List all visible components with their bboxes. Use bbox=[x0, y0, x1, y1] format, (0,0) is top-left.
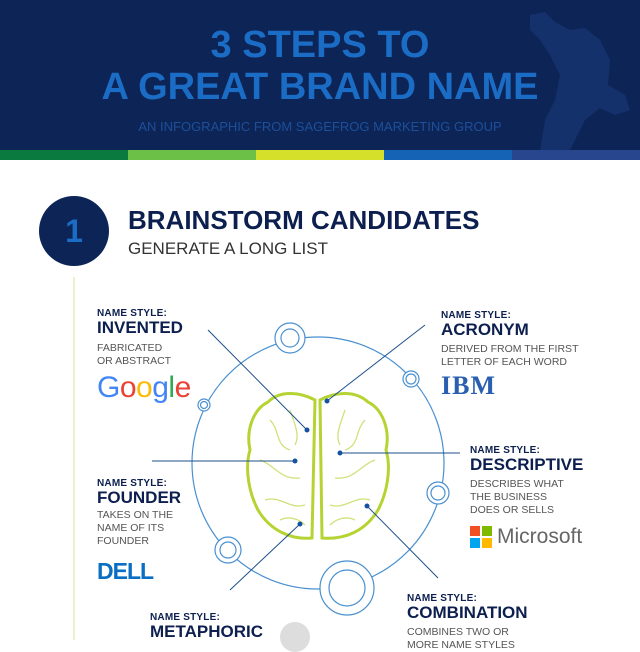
title: 3 STEPS TO bbox=[211, 24, 429, 66]
label: combination: COMBINATION bbox=[407, 603, 528, 622]
subtitle: AN INFOGRAPHIC FROM SAGEFROG MARKETING GROUP bbox=[138, 119, 502, 134]
label: invented: FABRICATED bbox=[97, 342, 162, 354]
logo: IBM: IBM bbox=[441, 371, 496, 400]
label: acronym: NAME STYLE: bbox=[441, 310, 511, 321]
label: acronym bbox=[441, 310, 578, 400]
color stripe bbox=[0, 150, 640, 160]
label: acronym: ACRONYM bbox=[441, 320, 529, 339]
title bbox=[102, 24, 538, 108]
icon: frog silhouette bbox=[530, 12, 630, 150]
label: descriptive bbox=[470, 445, 583, 548]
logo: google: Google bbox=[97, 371, 191, 404]
step number circle: 1 bbox=[65, 213, 83, 249]
label: descriptive: NAME STYLE: bbox=[470, 445, 540, 456]
label: descriptive: DESCRIBES WHAT bbox=[470, 478, 564, 490]
label: invented bbox=[97, 308, 191, 404]
label: combination: COMBINES TWO OR bbox=[407, 626, 509, 638]
step subheading: GENERATE A LONG LIST bbox=[128, 239, 328, 258]
label: metaphoric: NAME STYLE: bbox=[150, 612, 220, 623]
logo: microsoft: Microsoft bbox=[497, 525, 582, 548]
title: A GREAT BRAND NAME bbox=[102, 66, 538, 108]
step heading: BRAINSTORM CANDIDATES bbox=[128, 205, 479, 235]
label: acronym: LETTER OF EACH WORD bbox=[441, 356, 567, 368]
label: founder: NAME STYLE: bbox=[97, 478, 167, 489]
label: descriptive: DOES OR SELLS bbox=[470, 504, 554, 516]
label: combination: NAME STYLE: bbox=[407, 593, 477, 604]
label: combination bbox=[407, 593, 528, 651]
icon: apple bbox=[280, 622, 310, 652]
brain bbox=[248, 394, 388, 538]
label: combination: MORE NAME STYLES bbox=[407, 639, 515, 651]
label: invented: OR ABSTRACT bbox=[97, 355, 171, 367]
label: founder bbox=[97, 478, 181, 584]
label: invented: INVENTED bbox=[97, 318, 183, 337]
label: founder: NAME OF ITS bbox=[97, 522, 164, 534]
logo: dell: DELL bbox=[97, 558, 153, 584]
label: founder: FOUNDER bbox=[97, 488, 181, 507]
label: founder: TAKES ON THE bbox=[97, 509, 173, 521]
label: acronym: DERIVED FROM THE FIRST bbox=[441, 343, 578, 355]
header bbox=[0, 0, 640, 150]
label: invented: NAME STYLE: bbox=[97, 308, 167, 319]
label: descriptive: THE BUSINESS bbox=[470, 491, 547, 503]
label: founder: FOUNDER bbox=[97, 535, 149, 547]
timeline line bbox=[73, 277, 75, 640]
label: metaphoric: METAPHORIC bbox=[150, 622, 263, 641]
step number circle bbox=[39, 196, 109, 266]
label: metaphoric bbox=[150, 612, 263, 641]
label: descriptive: DESCRIPTIVE bbox=[470, 455, 583, 474]
